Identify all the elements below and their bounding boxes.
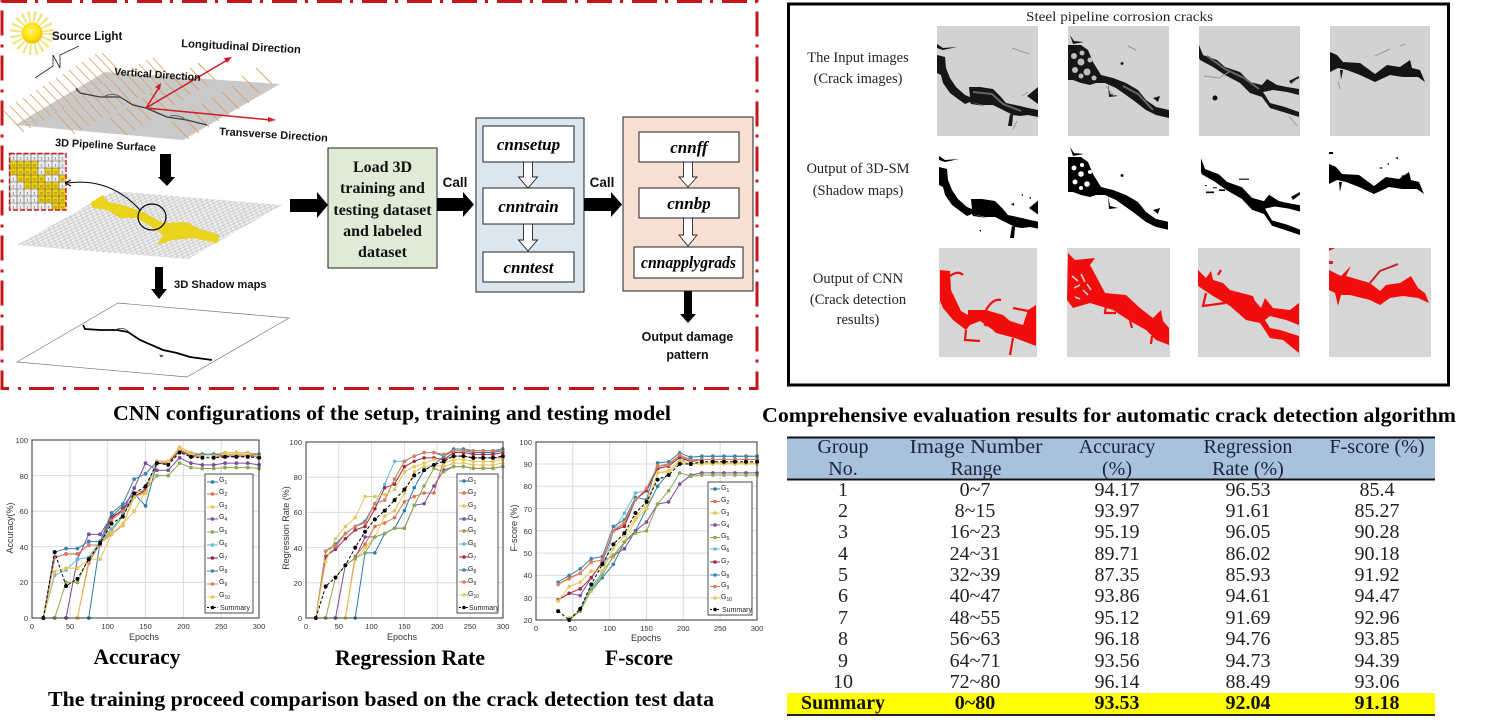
legend [708, 482, 752, 615]
table rows: 0~7 [960, 479, 990, 501]
x axis ticks [534, 624, 763, 633]
box: cnnapplygrads [634, 247, 743, 278]
row label: CNN output: (Crack detection [810, 292, 907, 308]
table header: Rate (%) [1212, 458, 1284, 480]
table rows: 93.97 [1094, 500, 1140, 522]
legend: 7 [726, 561, 729, 567]
arrow: output [680, 291, 696, 323]
summary row: Summary [801, 692, 885, 714]
shadow matrix inset: 00001001 [12, 170, 64, 174]
table rows: 91.69 [1226, 607, 1270, 629]
legend: G [219, 514, 224, 521]
x axis ticks [304, 622, 509, 631]
row label: CNN output: results) [837, 312, 880, 328]
x axis ticks: 300 [751, 624, 763, 633]
icon: light zigzag [35, 46, 79, 78]
box: cnnbp [639, 188, 739, 218]
y axis ticks: 90 [524, 460, 532, 469]
legend: G [721, 594, 726, 601]
panel: steel pipeline corrosion cracks [788, 4, 1448, 385]
y axis ticks: 0 [24, 614, 28, 623]
y axis ticks: 100 [519, 438, 532, 447]
shadow matrix inset: 11000001 [12, 184, 64, 188]
y axis ticks: 100 [15, 436, 28, 445]
legend: G [468, 553, 473, 560]
row label: CNN output: Output of CNN [813, 271, 903, 287]
row label: shadow maps: (Shadow maps) [813, 183, 903, 199]
arrow: surface to mesh [158, 154, 175, 186]
legend [457, 474, 499, 613]
shadow matrix inset [10, 154, 66, 210]
table rows: 90.28 [1354, 521, 1400, 543]
x axis ticks: 150 [640, 624, 653, 633]
x axis ticks: 50 [335, 622, 343, 631]
legend: G [219, 502, 224, 509]
legend: 9 [224, 582, 227, 588]
legend: 2 [224, 492, 227, 498]
y axis ticks: 60 [524, 527, 532, 536]
panel: cnn setup block [476, 118, 584, 292]
row label: input images: The Input images [807, 50, 909, 66]
legend: G [721, 558, 726, 565]
table rows: 89.71 [1094, 543, 1140, 565]
legend: 3 [726, 512, 729, 518]
legend: 7 [473, 556, 476, 562]
arrow: horizontal to dataset [290, 192, 328, 218]
y axis ticks: 70 [524, 505, 532, 514]
y axis ticks: 30 [524, 594, 532, 603]
image row: input crack images [937, 26, 1430, 136]
3D shadow map plane [17, 303, 289, 377]
heading: training comparison: The training proceed comparison based on the crack detection test data [48, 687, 715, 711]
legend: G [721, 582, 726, 589]
summary row: 92.04 [1226, 692, 1270, 714]
y axis ticks: 20 [294, 579, 302, 588]
table rows: 90.18 [1354, 543, 1400, 565]
label: output damage pattern: pattern [666, 348, 709, 362]
summary row: 91.18 [1354, 692, 1400, 714]
box: cnnapplygrads: cnnapplygrads [641, 253, 736, 272]
x axis ticks: 250 [714, 624, 726, 633]
legend: 9 [726, 585, 729, 591]
y axis ticks: 20 [524, 616, 532, 625]
legend: G [721, 509, 726, 516]
legend: 4 [473, 518, 476, 524]
y axis ticks: 0 [298, 614, 302, 623]
legend: G [468, 578, 473, 585]
table rows: 9 [838, 650, 848, 672]
table rows: 10 [833, 671, 853, 693]
legend: Summary [220, 605, 250, 612]
legend: Summary [469, 605, 499, 612]
y axis ticks: 80 [294, 473, 302, 482]
box: cnntrain: cnntrain [498, 197, 559, 216]
y axis ticks [15, 436, 28, 623]
table rows: 93.85 [1354, 628, 1400, 650]
line chart: f-score [509, 438, 763, 643]
arrow: call to propagation block: Call [590, 175, 614, 190]
table rows: 3 [838, 521, 848, 543]
legend: 5 [473, 530, 476, 536]
legend: G [468, 502, 473, 509]
legend [205, 474, 253, 613]
legend: G [219, 592, 224, 599]
y axis ticks: 50 [524, 549, 532, 558]
table rows: 7 [838, 607, 848, 629]
y axis ticks: 60 [20, 507, 28, 516]
table header: Regression [1204, 436, 1292, 458]
y axis ticks: 100 [289, 438, 302, 447]
legend: G [721, 533, 726, 540]
legend: G [219, 489, 224, 496]
x axis ticks: 200 [177, 622, 190, 631]
y axis ticks: 40 [524, 571, 532, 580]
table rows: 95.19 [1094, 521, 1140, 543]
box: load dataset: and labeled [343, 223, 422, 240]
table header: F-score (%) [1330, 436, 1424, 458]
row label: shadow maps: Output of 3D-SM [806, 161, 910, 177]
x axis ticks: 200 [431, 622, 443, 631]
legend: 10 [726, 597, 732, 603]
label: source light: Source Light [52, 31, 122, 43]
table rows: 93.56 [1094, 650, 1140, 672]
legend: 8 [473, 569, 476, 575]
legend: G [721, 485, 726, 492]
legend: 4 [726, 524, 729, 530]
table rows: 16~23 [950, 521, 1000, 543]
table header: Accuracy [1079, 436, 1155, 458]
heading: CNN configurations: CNN configurations of the setup, training and testing model [113, 401, 671, 425]
legend: 4 [224, 517, 227, 523]
legend: 1 [726, 488, 729, 494]
legend: G [219, 553, 224, 560]
table rows: 85.27 [1354, 500, 1400, 522]
legend: 3 [473, 505, 476, 511]
legend: Summary [722, 607, 752, 614]
x axis ticks: 150 [398, 622, 411, 631]
table rows: 95.12 [1094, 607, 1140, 629]
table rows: 87.35 [1094, 564, 1140, 586]
arrows: red direction vectors [146, 57, 276, 122]
box: load dataset: testing dataset [333, 202, 432, 219]
legend: 10 [473, 594, 479, 600]
table rows: 72~80 [950, 671, 1000, 693]
table rows: 91.61 [1226, 500, 1270, 522]
table rows: 94.73 [1226, 650, 1270, 672]
table rows: 94.39 [1354, 650, 1400, 672]
x axis ticks: 100 [603, 624, 616, 633]
arrow: setup to train [518, 162, 538, 188]
table header: (%) [1102, 458, 1132, 480]
chart title: regression rate: Regression Rate [335, 645, 485, 670]
x axis ticks: 50 [569, 624, 577, 633]
table rows: 93.86 [1094, 585, 1140, 607]
box: cnnsetup: cnnsetup [497, 135, 560, 154]
table rows: 64~71 [950, 650, 1000, 672]
legend: G [468, 540, 473, 547]
table rows: 96.18 [1094, 628, 1140, 650]
table rows: 40~47 [950, 585, 1000, 607]
table header: Image Number [910, 436, 1043, 458]
table rows: 85.93 [1226, 564, 1270, 586]
y axis ticks: 80 [524, 482, 532, 491]
legend: G [468, 515, 473, 522]
legend: 6 [726, 548, 729, 554]
legend: G [721, 545, 726, 552]
table rows: 56~63 [950, 628, 1000, 650]
axis label: epochs: Epochs [387, 632, 418, 642]
table rows: 32~39 [950, 564, 1000, 586]
box: cnnff [639, 132, 739, 162]
box: cnntest [483, 252, 574, 282]
legend: 9 [473, 581, 476, 587]
legend: G [468, 591, 473, 598]
legend: 5 [726, 536, 729, 542]
label: 3D shadow maps: 3D Shadow maps [174, 279, 267, 291]
summary row: 93.53 [1094, 692, 1140, 714]
table rows: 94.61 [1226, 585, 1270, 607]
legend: 6 [473, 543, 476, 549]
legend: G [219, 579, 224, 586]
box: cnntest: cnntest [503, 258, 555, 277]
x axis ticks: 300 [253, 622, 265, 631]
legend: 2 [726, 500, 729, 506]
heading: comprehensive evaluation: Comprehensive evaluation results for automatic crack detection algorithm [762, 403, 1457, 427]
y axis ticks: 40 [294, 544, 302, 553]
box: cnnbp: cnnbp [667, 194, 711, 213]
x axis ticks: 100 [101, 622, 114, 631]
summary row [787, 692, 1435, 715]
table header [787, 436, 1435, 480]
table rows: 1 [838, 479, 848, 501]
arrow: call to setup block [437, 175, 474, 217]
x axis ticks: 150 [139, 622, 152, 631]
shadow matrix inset: 11111100 [12, 204, 64, 210]
legend: G [721, 521, 726, 528]
legend: 8 [224, 569, 227, 575]
box: load dataset [328, 148, 437, 268]
image row: shadow maps [939, 147, 1424, 238]
chart title: accuracy: Accuracy [94, 644, 180, 669]
table rows: 93.06 [1354, 671, 1400, 693]
y axis ticks: 80 [20, 472, 28, 481]
table rows: 96.14 [1094, 671, 1140, 693]
label: transverse direction: Transverse Direction [219, 126, 328, 145]
table rows: 5 [838, 564, 848, 586]
table rows: 94.76 [1226, 628, 1270, 650]
arrow: call to propagation block [584, 175, 622, 217]
legend: 7 [224, 556, 227, 562]
table rows: 2 [838, 500, 848, 522]
legend: G [468, 527, 473, 534]
legend: 5 [224, 530, 227, 536]
y axis ticks: 20 [20, 578, 28, 587]
shadow matrix inset: 11110000 [12, 198, 64, 202]
3D pipeline surface [3, 53, 280, 140]
legend: G [468, 477, 473, 484]
legend: 1 [224, 480, 227, 486]
table rows: 8 [838, 628, 848, 650]
arrow: bp to applygrads [679, 218, 697, 246]
panel title: Steel pipeline corrosion cracks [1026, 10, 1213, 25]
box: cnntrain [483, 188, 574, 224]
box: load dataset: Load 3D [353, 159, 412, 176]
table rows: 24~31 [950, 543, 1000, 565]
shadow matrix inset: 00001111 [12, 162, 64, 168]
summary row: 0~80 [955, 692, 995, 714]
icon: sun [17, 18, 47, 48]
x axis ticks: 0 [304, 622, 308, 631]
label: longitudinal direction: Longitudinal Direction [181, 38, 301, 56]
table rows: 6 [838, 585, 848, 607]
box: cnnsetup [483, 126, 574, 162]
x axis ticks: 200 [677, 624, 690, 633]
table rows: 96.53 [1226, 479, 1270, 501]
legend: G [468, 566, 473, 573]
label: vertical direction: Vertical Direction [114, 66, 201, 84]
label: output damage pattern: Output damage [642, 330, 733, 344]
table rows: 4 [838, 543, 848, 565]
legend: G [219, 540, 224, 547]
table rows: 85.4 [1360, 479, 1394, 501]
y axis ticks: 60 [294, 508, 302, 517]
table rows: 8~15 [955, 500, 995, 522]
table rows [833, 479, 1400, 693]
legend: G [219, 566, 224, 573]
arrow: mesh to shadow maps [151, 267, 167, 299]
row label: input images: (Crack images) [814, 71, 903, 87]
x axis ticks: 0 [30, 622, 34, 631]
legend: 10 [224, 595, 230, 601]
legend: 8 [726, 574, 729, 580]
image row: CNN red detection output [939, 248, 1431, 357]
line chart: regression rate [281, 438, 509, 642]
table header: Range [950, 458, 1002, 480]
table rows: 96.05 [1226, 521, 1270, 543]
y axis ticks [519, 438, 532, 625]
table rows: 48~55 [950, 607, 1000, 629]
panel: CNN configuration diagram [2, 2, 757, 388]
axis label: accuracy: Accuracy(%) [5, 502, 15, 554]
legend: 3 [224, 505, 227, 511]
table rows: 94.47 [1354, 585, 1400, 607]
arrow: call to setup block: Call [443, 175, 467, 190]
x axis ticks: 50 [66, 622, 74, 631]
x axis ticks: 100 [365, 622, 378, 631]
legend: 6 [224, 543, 227, 549]
legend: G [219, 477, 224, 484]
table header: Group [817, 436, 869, 458]
table rows: 86.02 [1226, 543, 1270, 565]
x axis ticks [30, 622, 265, 631]
box: load dataset: dataset [358, 244, 408, 261]
mesh surface with yellow shadow cells [17, 180, 282, 259]
x axis ticks: 300 [497, 622, 509, 631]
x axis ticks: 250 [464, 622, 476, 631]
y axis ticks [289, 438, 302, 623]
table rows: 92.96 [1354, 607, 1400, 629]
table header: No. [828, 458, 858, 480]
line chart: accuracy [5, 436, 265, 642]
arrow: ff to bp [679, 162, 697, 187]
table: evaluation results [787, 436, 1435, 715]
x axis ticks: 0 [534, 624, 538, 633]
box: load dataset: training and [340, 180, 425, 197]
legend: 2 [473, 492, 476, 498]
shadow matrix inset: 11110000 [12, 190, 64, 196]
axis label: epochs: Epochs [631, 633, 662, 643]
chart title: f-score: F-score [605, 645, 673, 670]
axis label: epochs: Epochs [129, 632, 160, 642]
y axis ticks: 40 [20, 543, 28, 552]
x axis ticks: 250 [215, 622, 227, 631]
table rows: 88.49 [1226, 671, 1270, 693]
panel: cnn propagation block [623, 117, 753, 291]
label: 3D pipeline surface: 3D Pipeline Surface [55, 137, 156, 154]
legend: G [721, 497, 726, 504]
shadow matrix inset: 11111111 [12, 156, 64, 160]
arrow: train to test [518, 224, 538, 251]
table rows: 91.92 [1354, 564, 1400, 586]
axis label: f-score: F-score (%) [509, 504, 519, 552]
shadow matrix inset: 10000110 [12, 176, 64, 182]
legend: G [468, 489, 473, 496]
axis label: regression rate: Regression Rate (%) [281, 486, 291, 570]
legend: G [219, 527, 224, 534]
legend: G [721, 571, 726, 578]
legend: 1 [473, 480, 476, 486]
table rows: 94.17 [1094, 479, 1140, 501]
box: cnnff: cnnff [670, 138, 710, 157]
